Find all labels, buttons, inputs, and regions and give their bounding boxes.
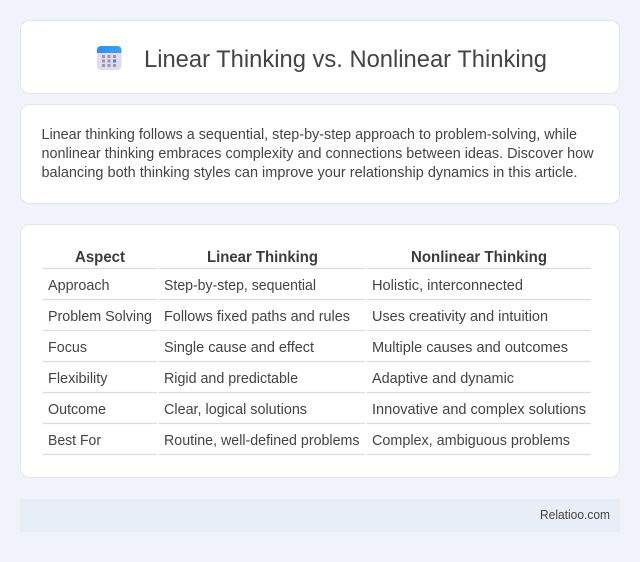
title: Linear Thinking vs. Nonlinear Thinking — [144, 46, 547, 73]
table row: problem solving: Uses creativity and intuition — [372, 309, 548, 325]
table row: best for: Routine, well-defined problems — [164, 433, 360, 449]
table header row: Nonlinear Thinking — [411, 249, 547, 266]
table row: outcome: Outcome — [48, 402, 106, 418]
table row: outcome: Innovative and complex solutions — [372, 402, 586, 418]
table row: problem solving — [48, 309, 548, 325]
table row: outcome: Clear, logical solutions — [164, 402, 307, 418]
table row: focus: Single cause and effect — [164, 340, 314, 356]
panel: comparison table — [20, 224, 620, 478]
icon: calendar — [97, 46, 122, 70]
table row: approach: Holistic, interconnected — [372, 278, 523, 294]
table row: approach: Approach — [48, 278, 110, 294]
table row: flexibility — [48, 371, 514, 387]
table row: flexibility: Adaptive and dynamic — [372, 371, 514, 387]
text block: introduction: nonlinear thinking embraces complexity and connections between ideas. Discover how — [42, 146, 594, 162]
table row: focus — [48, 340, 568, 356]
table row: focus: Focus — [48, 340, 87, 356]
table row: approach: Step-by-step, sequential — [164, 278, 316, 294]
table row: problem solving: Problem Solving — [48, 309, 152, 325]
table header row: Aspect — [75, 249, 126, 266]
panel: introduction — [20, 104, 620, 204]
panel: header — [20, 20, 620, 94]
table row: flexibility: Flexibility — [48, 371, 108, 387]
text block: introduction: balancing both thinking styles can improve your relationship dynamics in this article. — [42, 165, 578, 181]
text block: introduction: Linear thinking follows a sequential, step-by-step approach to problem-solving, while — [42, 127, 577, 143]
footer — [20, 499, 620, 532]
text block: introduction — [42, 127, 594, 181]
table row: approach — [48, 278, 523, 294]
table header row: Linear Thinking — [207, 249, 318, 266]
footer text: Relatioo.com — [540, 508, 610, 522]
table row: best for: Complex, ambiguous problems — [372, 433, 570, 449]
table row: problem solving: Follows fixed paths and rules — [164, 309, 350, 325]
table row: best for: Best For — [48, 433, 101, 449]
table row: flexibility: Rigid and predictable — [164, 371, 298, 387]
table row: focus: Multiple causes and outcomes — [372, 340, 568, 356]
table row: outcome — [48, 402, 586, 418]
table header row — [75, 249, 547, 266]
table row: best for — [48, 433, 570, 449]
